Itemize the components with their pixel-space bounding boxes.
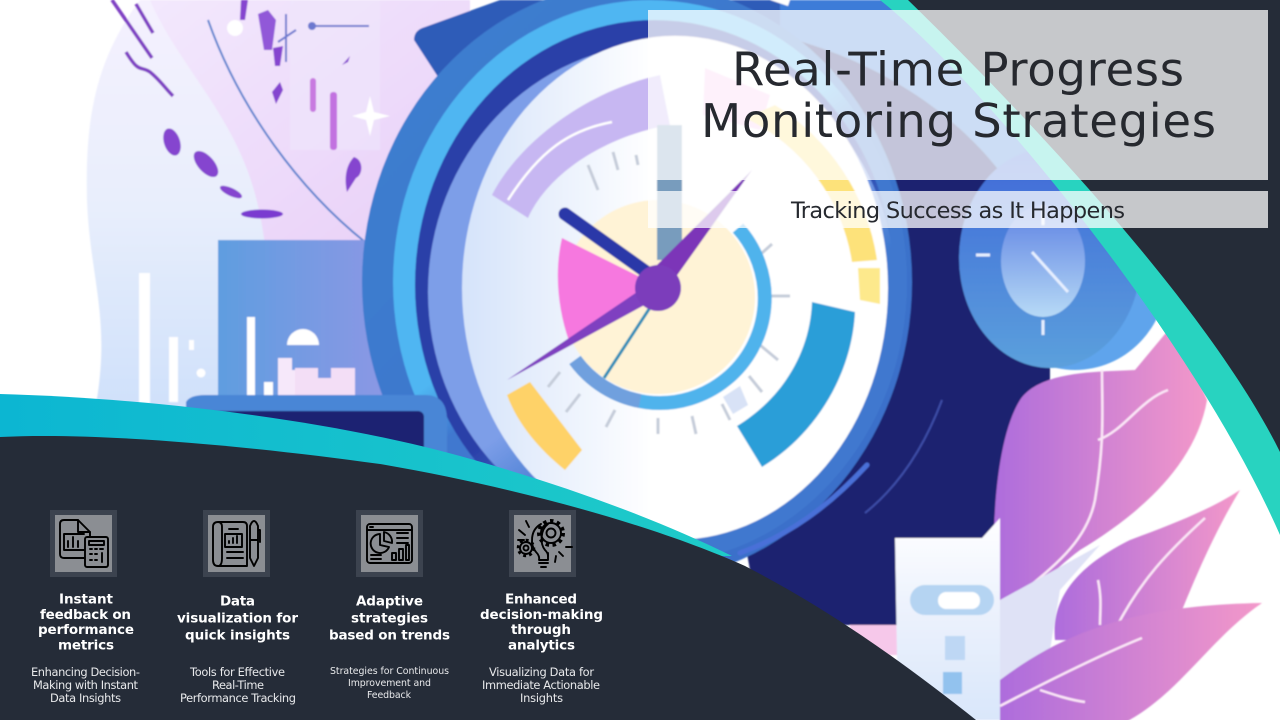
- heading: [177, 594, 298, 644]
- subtitle: Tracking Success as It Happens: [790, 198, 1125, 224]
- cream dial: [561, 200, 755, 394]
- pale blue blob: [87, 0, 400, 410]
- description: [330, 666, 449, 701]
- lavender arc segment: [492, 75, 670, 218]
- watch face: [462, 36, 888, 540]
- hub: [635, 265, 681, 311]
- curved line: [208, 20, 365, 242]
- description: Strategies for Continuous: [330, 666, 449, 677]
- description: Data Insights: [50, 691, 121, 705]
- heading: visualization for: [177, 610, 298, 626]
- heading: Data: [220, 594, 255, 610]
- dial ticks: [548, 152, 790, 434]
- bottom-left teal swoosh: [0, 394, 732, 560]
- gray vertical bar: [657, 125, 682, 260]
- column 3: adaptive strategies: [329, 510, 450, 701]
- pale chart ghost: [290, 0, 380, 150]
- description: Visualizing Data for: [489, 665, 594, 679]
- pale leaf shadow: [1000, 545, 1100, 680]
- icon: document with calculator: [50, 510, 117, 577]
- description: Making with Instant: [33, 678, 139, 692]
- pink sector: [558, 238, 658, 341]
- description: [31, 665, 140, 705]
- purple dashes: [112, 0, 361, 218]
- watch lug: [414, 0, 780, 80]
- heading: [38, 592, 134, 654]
- phone card: [895, 518, 1000, 720]
- column 2: data visualization: [177, 510, 298, 705]
- description: Enhancing Decision-: [31, 665, 140, 679]
- description: Performance Tracking: [180, 691, 296, 705]
- top chart motif: [278, 14, 369, 62]
- top-right teal swoosh: [880, 0, 1280, 535]
- rim highlight arcs: [740, 465, 867, 553]
- hour hand: [565, 214, 652, 276]
- leaf middle: [1055, 490, 1240, 640]
- heading: decision-making: [480, 607, 603, 623]
- description: [482, 665, 600, 705]
- heading: analytics: [508, 638, 575, 654]
- leaf upper: [994, 322, 1207, 640]
- chart bars: [139, 273, 355, 403]
- heading: [329, 594, 450, 644]
- title: Real-Time Progress: [732, 42, 1184, 96]
- chart window: [218, 240, 388, 410]
- pale tile: [723, 386, 748, 414]
- heading: based on trends: [329, 628, 450, 644]
- heading: feedback on: [40, 607, 131, 623]
- icon: dashboard window: [356, 510, 423, 577]
- blue dial arc: [575, 228, 765, 403]
- blue field behind watch: [760, 0, 1120, 260]
- teal hand: [604, 300, 655, 378]
- description: Feedback: [367, 690, 412, 701]
- heading: through: [511, 622, 571, 638]
- heading: metrics: [58, 638, 114, 654]
- description: Real-Time: [212, 678, 264, 692]
- subtitle panel: [648, 191, 1268, 228]
- top-right dark corner: [908, 0, 1280, 452]
- blue segment: [737, 302, 855, 467]
- pink block: [703, 68, 770, 130]
- navy backdrop: [650, 20, 1050, 625]
- laptop base: [186, 395, 447, 470]
- watch rings: [362, 0, 912, 582]
- column 4: enhanced decision-making: [480, 510, 603, 705]
- icon: lightbulb with gears: [509, 510, 576, 577]
- description: Improvement and: [348, 678, 431, 689]
- description: Insights: [520, 691, 563, 705]
- column 1: instant feedback: [31, 510, 140, 705]
- leaf lower: [1000, 603, 1262, 720]
- icon: report and pen: [203, 510, 270, 577]
- description: Immediate Actionable: [482, 678, 600, 692]
- title: [701, 42, 1216, 148]
- minute hand: [507, 290, 650, 380]
- orange segment: [507, 382, 582, 470]
- yellow segments: [745, 105, 877, 262]
- description: Tools for Effective: [189, 665, 285, 679]
- small clock: [983, 180, 1167, 370]
- heading: quick insights: [185, 628, 290, 644]
- heading: [480, 592, 603, 654]
- title panel: [648, 10, 1268, 180]
- title: Monitoring Strategies: [701, 94, 1216, 148]
- lilac backdrop: [150, 0, 470, 245]
- heading: Adaptive: [356, 594, 423, 610]
- description: [180, 665, 296, 705]
- heading: strategies: [351, 610, 428, 626]
- heading: Enhanced: [505, 592, 577, 608]
- sparkle: [352, 96, 390, 136]
- bottom-left dark panel: [0, 436, 976, 720]
- heading: performance: [38, 622, 134, 638]
- heading: Instant: [59, 592, 114, 608]
